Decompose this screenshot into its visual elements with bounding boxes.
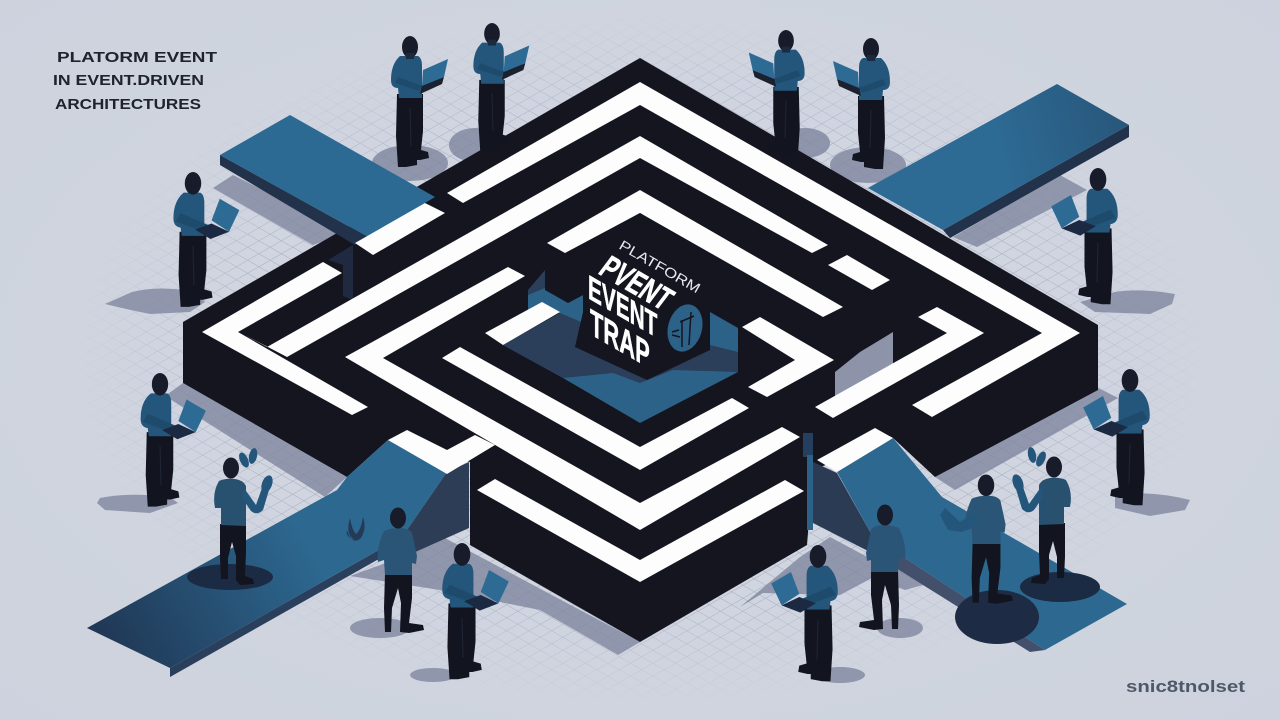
person: bottom-left with laptop	[410, 543, 509, 682]
icon: small emblem on left road	[347, 517, 365, 541]
path: second long arm	[245, 136, 828, 357]
maze cast shadows	[165, 175, 1118, 655]
person: top-right 2	[833, 38, 890, 169]
person: bottom-right back view	[859, 504, 923, 638]
plank: top-left blue walkway	[220, 115, 435, 245]
person: top-left 1	[391, 36, 448, 167]
ramp: lower-left blue road	[87, 440, 469, 677]
person: right lower	[1083, 369, 1190, 516]
title: ARCHITECTURES	[55, 96, 201, 113]
path: third chevron	[345, 267, 800, 530]
maze white path lines	[202, 82, 1080, 582]
cube label: PVENT: PVENT	[593, 249, 681, 317]
path: short bar right	[828, 255, 890, 290]
title: IN EVENT.DRIVEN	[53, 72, 204, 89]
path: small inner chevron	[742, 317, 834, 397]
title	[53, 49, 217, 113]
cube label: PLATFORM: PLATFORM	[616, 237, 703, 296]
plank: top-right blue walkway	[868, 84, 1129, 238]
central pit floor	[503, 270, 738, 423]
person: top-right 1	[749, 30, 805, 158]
path: inner top chevron	[547, 190, 843, 317]
path: outer chevron	[447, 82, 1080, 417]
person: left upper	[105, 172, 239, 314]
person: on right road holding phone	[940, 474, 1039, 644]
person: top-left 2	[473, 23, 529, 151]
person: bottom-right with laptop	[771, 545, 865, 683]
floor visible through right gap	[835, 332, 893, 397]
inner wall accents	[328, 245, 353, 300]
person floor shadows behind maze	[372, 128, 906, 183]
person: right upper	[1051, 168, 1175, 314]
person: left lower	[97, 373, 206, 513]
path: lowest chevron	[477, 479, 804, 582]
maze block	[183, 58, 1098, 642]
title: PLATORM EVENT	[57, 49, 217, 66]
watermark: snic8tnolset	[1126, 677, 1245, 696]
path: pit bar	[485, 302, 560, 345]
person: bottom-left back view	[350, 508, 424, 638]
cube label: EVENT: EVENT	[588, 268, 657, 346]
path: short bar by plank	[355, 203, 445, 255]
person: waving on right road	[1010, 446, 1100, 602]
icon: cube emblem	[662, 300, 708, 356]
path: right chevron	[815, 307, 984, 418]
path: right ramp top	[817, 428, 893, 472]
cube label: TRAP: TRAP	[590, 301, 650, 377]
person: waving on left road	[187, 447, 275, 590]
floor grid	[98, 32, 1178, 686]
ramp: lower-right blue road	[803, 433, 1127, 652]
central cube	[545, 213, 710, 380]
path: branch to lower-left ramp	[388, 430, 495, 474]
path: left chevron	[202, 262, 368, 415]
path: inner bottom chevron	[442, 347, 749, 470]
